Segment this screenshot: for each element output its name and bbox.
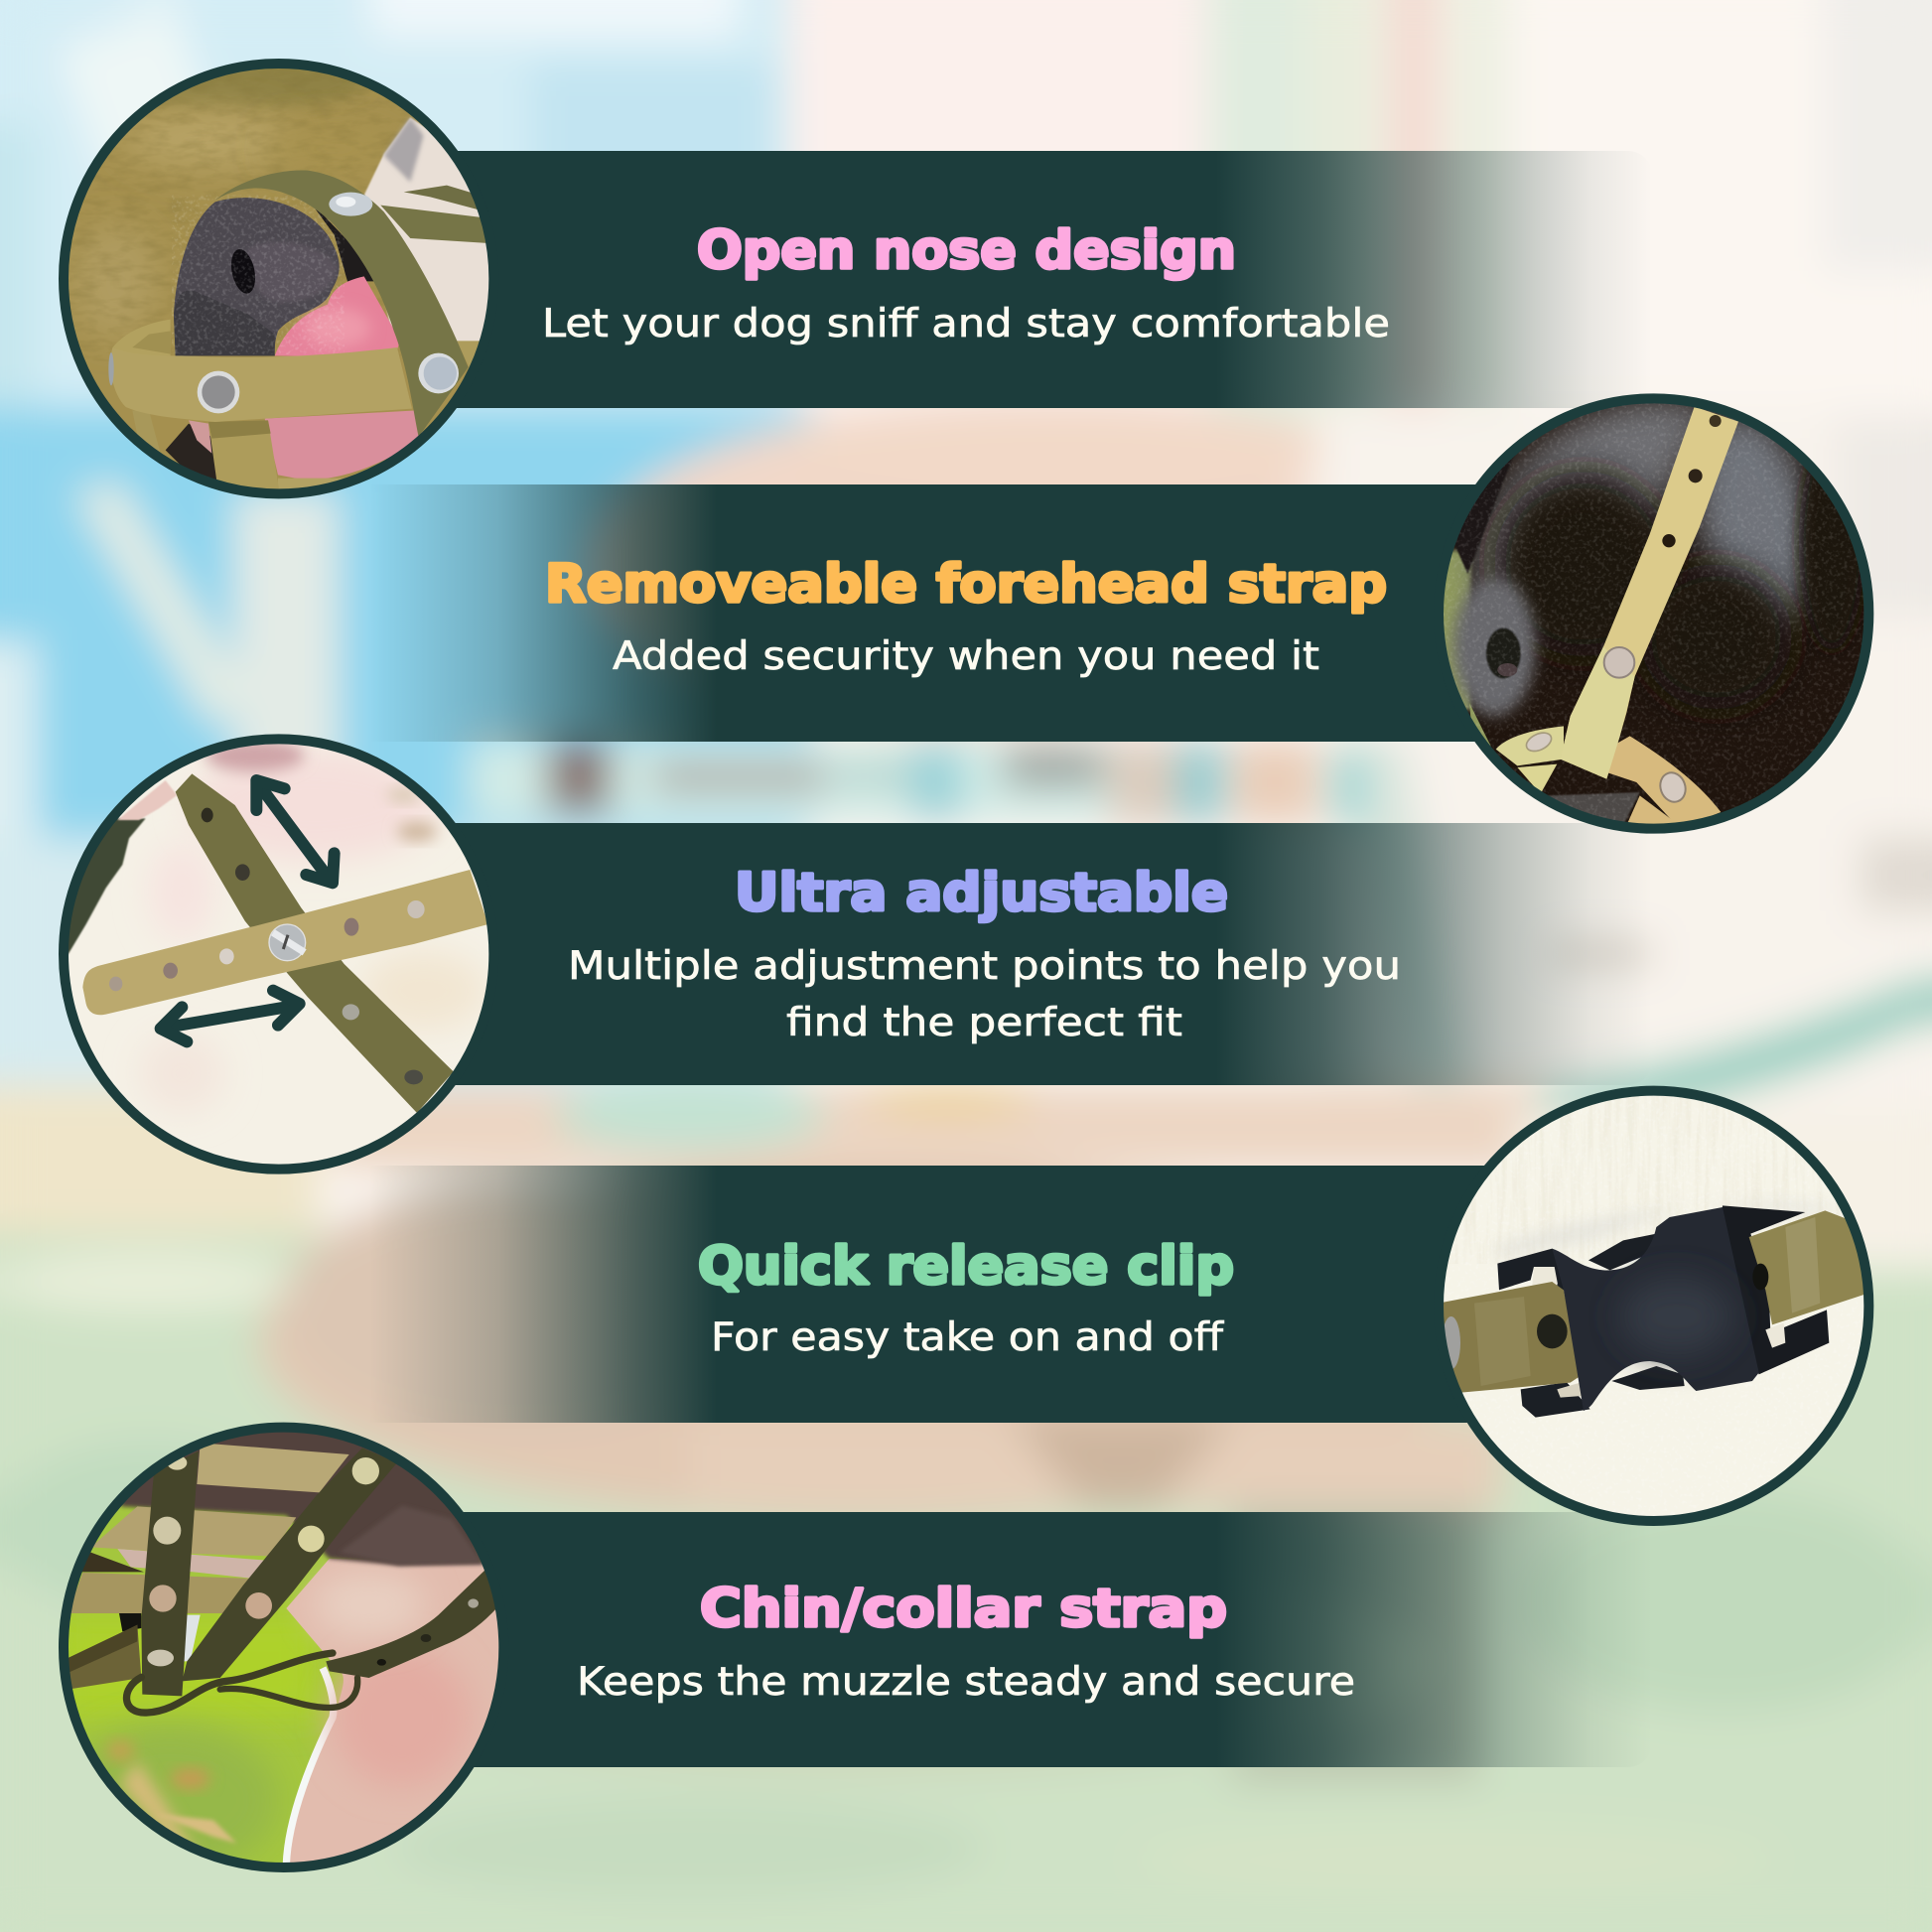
photo: quick release buckle: [1425, 1078, 1881, 1535]
panel: chin/collar strap: [298, 1512, 1652, 1767]
arrow: vertical adjustment: [256, 780, 335, 883]
panel: quick release clip: [369, 1166, 1650, 1423]
text: adjustable description: find the perfect fit: [786, 1000, 1182, 1045]
photo: black dog with forehead strap: [1425, 385, 1881, 842]
panel: removeable forehead strap: [369, 484, 1650, 742]
text: chin strap description: Keeps the muzzle steady and secure: [577, 1659, 1355, 1705]
photo: chin and collar strap: [55, 1420, 511, 1876]
panel: ultra adjustable: [298, 823, 1652, 1085]
arrow: horizontal adjustment: [161, 991, 300, 1041]
photo: adjustable straps on white fur: [50, 726, 506, 1182]
heading: removeable forehead strap: Removeable forehead strap: [545, 554, 1387, 615]
text: quick release description: For easy take on and off: [711, 1314, 1224, 1360]
panel: open nose design: [298, 151, 1652, 408]
heading: open nose design: Open nose design: [697, 220, 1236, 281]
heading: quick release clip: Quick release clip: [698, 1236, 1234, 1297]
heading: chin/collar strap: Chin/collar strap: [700, 1579, 1227, 1639]
heading: ultra adjustable: Ultra adjustable: [735, 863, 1228, 923]
text: adjustable description: [568, 943, 1401, 1045]
text: open nose description: Let your dog sniff and stay comfortable: [542, 301, 1390, 346]
text: adjustable description: Multiple adjustment points to help you: [568, 943, 1401, 989]
text: forehead strap description: Added security when you need it: [613, 633, 1319, 679]
photo: dog nose in muzzle: [50, 50, 506, 506]
